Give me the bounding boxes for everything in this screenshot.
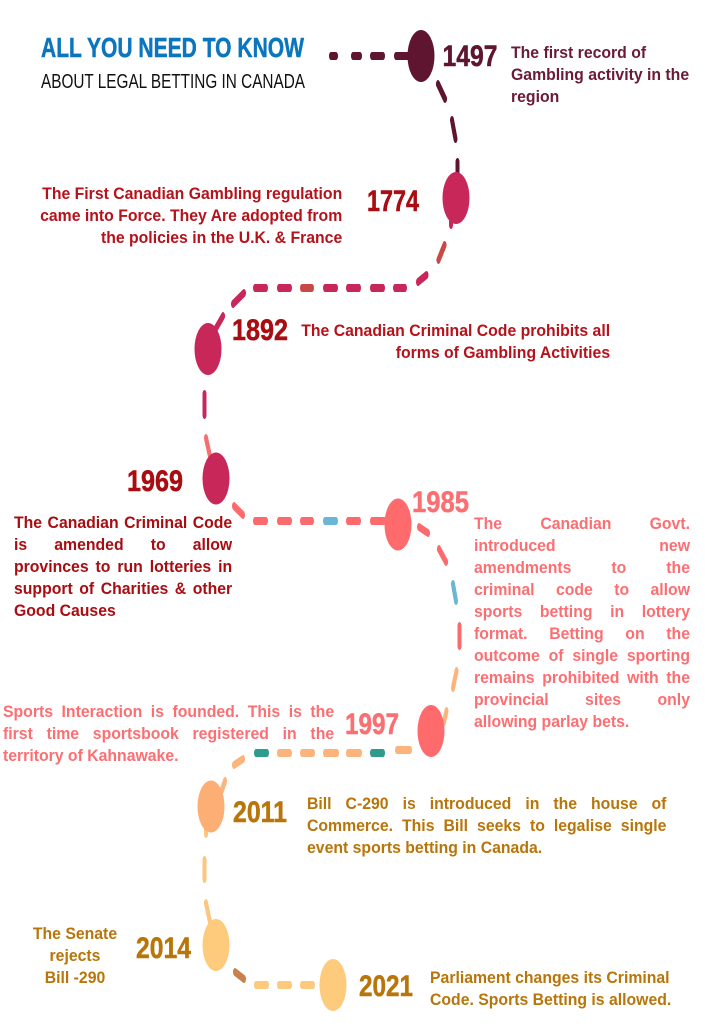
text: 1997 description: first time sportsbook registered in the <box>3 725 334 743</box>
text: 1985 description: sports betting in lottery <box>474 603 690 621</box>
text: 2011 description: event sports betting in Canada. <box>307 839 542 857</box>
connector: 2014 to 2021 <box>235 972 313 985</box>
text: 1774 description: The First Canadian Gambling regulation <box>42 185 342 203</box>
text: 1997 description: Sports Interaction is founded. This is the <box>3 703 334 721</box>
text: 1969 description <box>14 514 232 620</box>
connector: title to 1497 <box>331 52 415 60</box>
connector: 1892 to 1969 <box>204 394 210 454</box>
text: 2014 description: Bill -290 <box>45 969 105 987</box>
year 1997: 1997 <box>345 708 399 741</box>
text: 1985 description: criminal code to allow <box>474 581 690 599</box>
node 1969 <box>202 452 230 504</box>
year 1969: 1969 <box>127 465 183 498</box>
text: 1985 description: provincial sites only <box>474 691 690 709</box>
text: 2021 description <box>430 969 671 1009</box>
text: 1497 description: Gambling activity in the <box>511 66 689 84</box>
text: 1985 description: allowing parlay bets. <box>474 713 629 731</box>
text: 1985 description: format. Betting on the <box>474 625 690 643</box>
text: 1969 description: support of Charities & other <box>14 580 232 598</box>
connector: 1985 to 1997 <box>419 527 460 722</box>
year 1497: 1497 <box>442 40 498 73</box>
text: 2021 description: Code. Sports Betting is allowed. <box>430 991 671 1009</box>
year 2011: 2011 <box>233 796 287 829</box>
text: 1969 description: is amended to allow <box>14 536 232 554</box>
text: 2014 description: The Senate <box>33 925 117 943</box>
text: 2014 description: rejects <box>50 947 100 965</box>
text: 1985 description <box>474 515 690 731</box>
text: 1774 description: came into Force. They Are adopted from <box>40 207 342 225</box>
node 2011 <box>198 780 224 832</box>
year 1985: 1985 <box>412 486 469 519</box>
text: 2011 description: Commerce. This Bill seeks to legalise single <box>307 817 666 835</box>
text: 1969 description: The Canadian Criminal Code <box>14 514 232 532</box>
year 1892: 1892 <box>232 314 288 347</box>
text: 1969 description: Good Causes <box>14 602 115 620</box>
year 2014: 2014 <box>136 932 191 965</box>
text: 1997 description: territory of Kahnawake. <box>3 747 179 765</box>
text: 1985 description: amendments to the <box>474 559 690 577</box>
text: 1985 description: remains prohibited with the <box>474 669 690 687</box>
node 1774 <box>442 172 470 224</box>
connector: 1969 to 1985 <box>234 506 385 521</box>
text: 2021 description: Parliament changes its Criminal <box>430 969 670 987</box>
text: 2014 description <box>33 925 117 987</box>
connector: 1997 to 2011 <box>222 750 410 790</box>
node 1997 <box>418 705 444 757</box>
text: 1497 description: region <box>511 88 559 106</box>
text: 1997 description <box>3 703 334 765</box>
connector paths <box>194 30 470 1011</box>
text: 2011 description: Bill C-290 is introduced in the house of <box>307 795 666 813</box>
node 1497 <box>408 30 434 82</box>
title: ALL YOU NEED TO KNOW <box>41 32 304 63</box>
text: 1892 description: The Canadian Criminal Code prohibits all <box>301 322 610 340</box>
text: 1892 description: forms of Gambling Activities <box>395 344 610 362</box>
text: 1774 description: the policies in the U.K. & France <box>101 229 342 247</box>
text: 1497 description <box>511 44 689 106</box>
text: 1774 description <box>40 185 342 247</box>
connector: 1774 to 1892 <box>215 222 451 330</box>
year 1774: 1774 <box>367 185 419 218</box>
text: 1969 description: provinces to run lotteries in <box>14 558 232 576</box>
text: 1892 description <box>301 322 610 362</box>
node 2021 <box>320 959 346 1011</box>
text: 1497 description: The first record of <box>511 44 646 62</box>
year 2021: 2021 <box>359 970 413 1003</box>
subtitle: ABOUT LEGAL BETTING IN CANADA <box>41 70 305 93</box>
node 2014 <box>202 919 230 971</box>
connector: 1497 to 1774 <box>438 84 458 175</box>
text: 1985 description: introduced new <box>474 537 690 555</box>
node 1985 <box>384 498 412 550</box>
node 1892 <box>194 323 222 375</box>
connector: 2011 to 2014 <box>204 830 210 922</box>
text: 2011 description <box>307 795 666 857</box>
text: 1985 description: The Canadian Govt. <box>474 515 690 533</box>
text: 1985 description: outcome of single sporting <box>474 647 690 665</box>
